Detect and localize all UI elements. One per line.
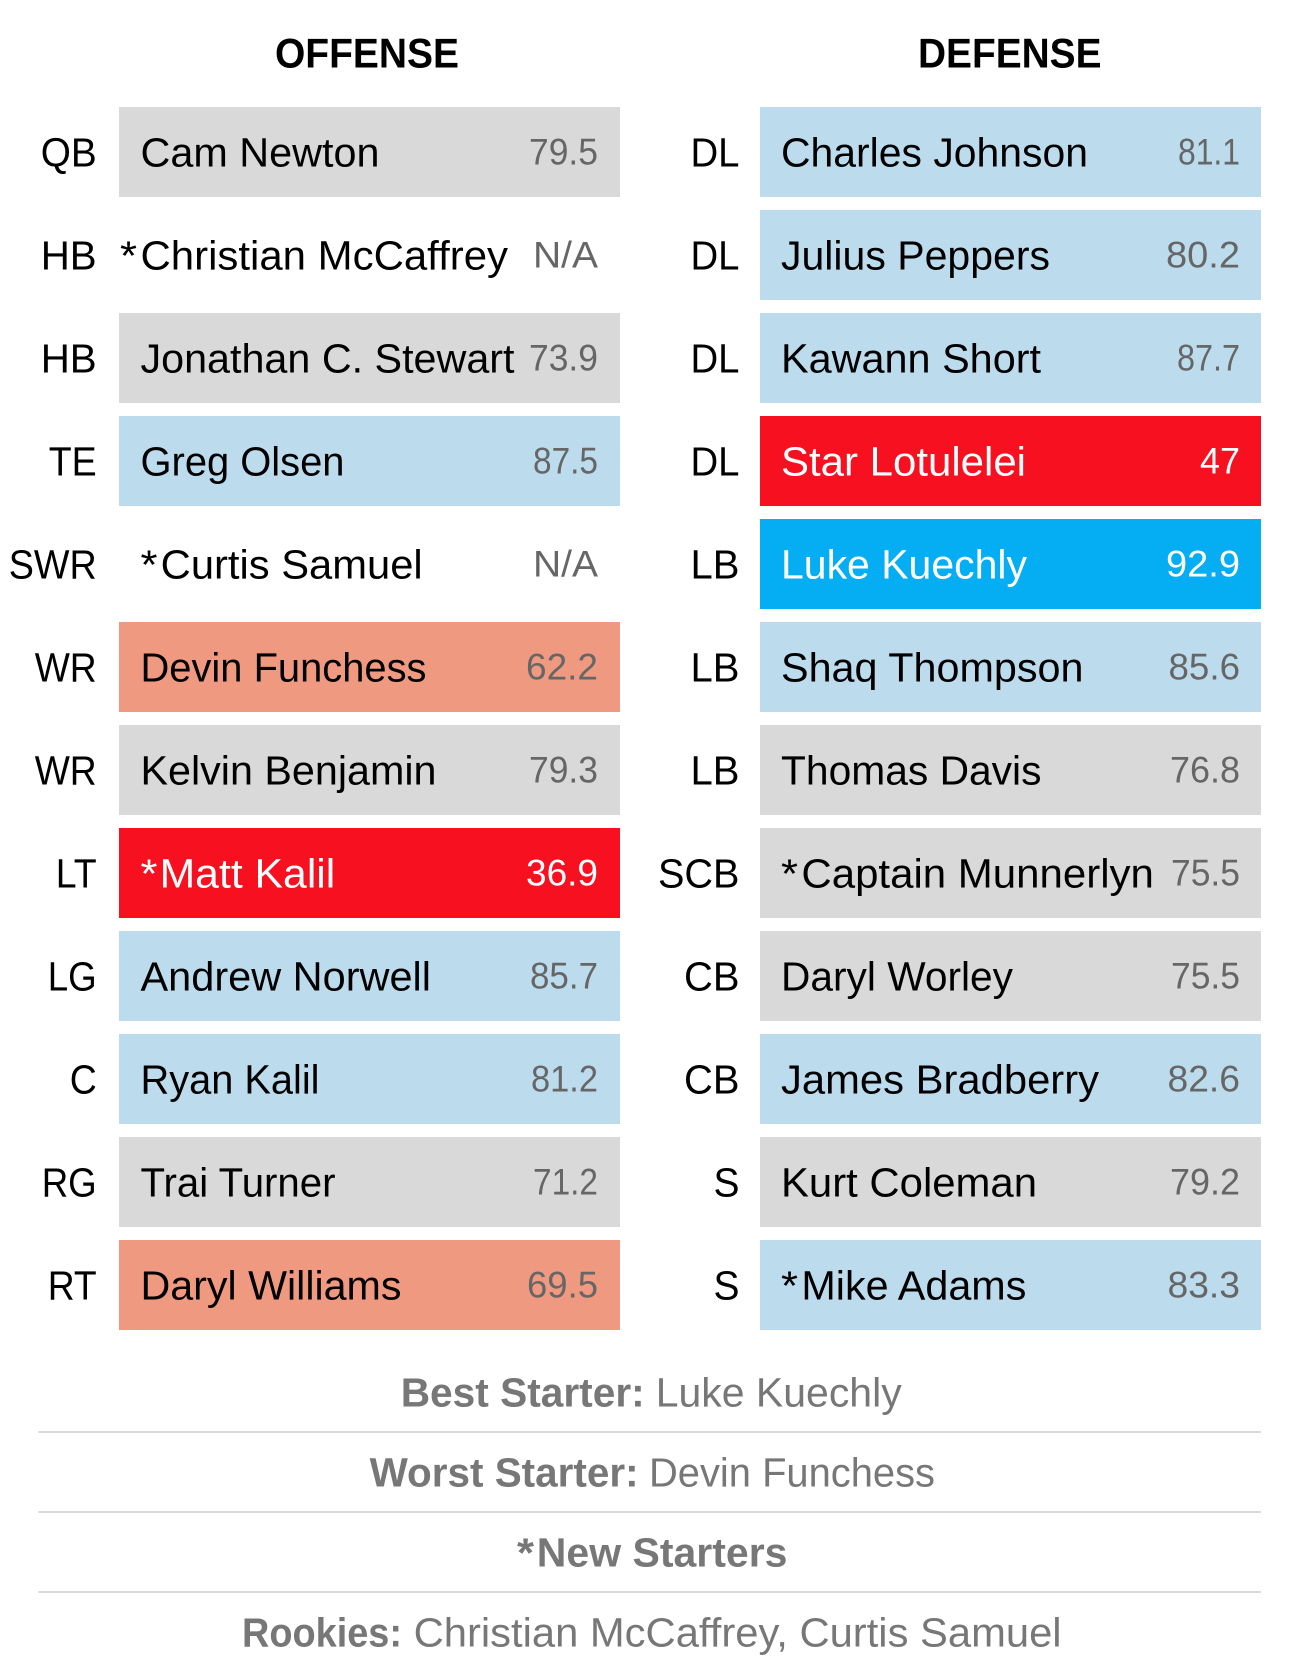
row: SCB Captain Munnerlyn: Captain Munnerlyn: [801, 850, 1154, 896]
row: RG Trai Turner: 71.2: [533, 1162, 598, 1202]
row: DL Julius Peppers: [690, 210, 1261, 300]
note: rookies: Christian McCaffrey, Curtis Samuel: [414, 1609, 1062, 1655]
row: SCB Captain Munnerlyn: [658, 828, 1261, 918]
row: WR Kelvin Benjamin: 79.3: [529, 750, 598, 790]
row: RT Daryl Williams: Daryl Williams: [140, 1262, 402, 1308]
heading: defense: DEFENSE: [918, 30, 1102, 76]
row: DL Kawann Short: [690, 313, 1261, 403]
row: DL Star Lotulelei: [690, 416, 1261, 506]
row: DL Charles Johnson: 81.1: [1178, 132, 1240, 172]
row: TE Greg Olsen: [49, 416, 620, 506]
row: CB Daryl Worley: 75.5: [1171, 956, 1240, 996]
row: LT Matt Kalil: [56, 828, 620, 918]
row: C Ryan Kalil: C: [70, 1056, 97, 1102]
row: SWR Curtis Samuel: N/A: [533, 544, 598, 584]
row: S Kurt Coleman: 79.2: [1170, 1162, 1240, 1202]
row: C Ryan Kalil: Ryan Kalil: [140, 1056, 320, 1102]
row: DL Kawann Short: Kawann Short: [781, 336, 1042, 382]
row: S Kurt Coleman: Kurt Coleman: [781, 1160, 1037, 1206]
row: LT Matt Kalil: Matt Kalil: [160, 850, 335, 896]
row: LB Luke Kuechly: LB: [690, 542, 740, 588]
row: RT Daryl Williams: RT: [48, 1262, 97, 1308]
note: best starter: [401, 1369, 902, 1415]
row: S Kurt Coleman: S: [714, 1160, 740, 1206]
row: DL Charles Johnson: DL: [690, 130, 740, 176]
row: LB Luke Kuechly: 92.9: [1166, 544, 1240, 584]
row: TE Greg Olsen: 87.5: [533, 440, 598, 482]
row: SCB Captain Munnerlyn: 75.5: [1171, 852, 1240, 894]
row: RT Daryl Williams: [48, 1240, 620, 1330]
row: LB Luke Kuechly: Luke Kuechly: [781, 542, 1027, 588]
row: WR Kelvin Benjamin: WR: [35, 748, 97, 794]
row: HB Jonathan C. Stewart: [41, 313, 620, 403]
row: RG Trai Turner: RG: [42, 1160, 97, 1206]
row: LB Thomas Davis: LB: [690, 748, 740, 794]
row: QB Cam Newton: 79.5: [529, 132, 598, 172]
heading: offense: OFFENSE: [275, 30, 459, 76]
row: LG Andrew Norwell: LG: [48, 954, 97, 1000]
row: LT Matt Kalil: *: [140, 850, 158, 896]
note: worst starter: Devin Funchess: [649, 1449, 935, 1495]
row: SWR Curtis Samuel: Curtis Samuel: [161, 542, 423, 588]
row: LT Matt Kalil: 36.9: [526, 852, 598, 894]
row: DL Charles Johnson: Charles Johnson: [781, 130, 1088, 176]
row: S Mike Adams: S: [714, 1262, 740, 1308]
note: rookies: Rookies:: [242, 1609, 402, 1655]
row: LB Thomas Davis: 76.8: [1170, 750, 1240, 790]
panel: defense: [658, 30, 1261, 1330]
row: S Mike Adams: 83.3: [1168, 1264, 1240, 1306]
row: RG Trai Turner: Trai Turner: [140, 1160, 336, 1206]
row: QB Cam Newton: [41, 107, 620, 197]
row: WR Devin Funchess: [35, 622, 620, 712]
row: HB Jonathan C. Stewart: HB: [41, 336, 97, 382]
row: HB Jonathan C. Stewart: Jonathan C. Stewart: [140, 336, 515, 382]
row: CB James Bradberry: [684, 1034, 1261, 1124]
row: HB Christian McCaffrey: [41, 232, 598, 278]
row: LB Luke Kuechly: [690, 519, 1261, 609]
row: WR Devin Funchess: Devin Funchess: [140, 644, 426, 690]
row: CB Daryl Worley: Daryl Worley: [781, 954, 1013, 1000]
row: C Ryan Kalil: [70, 1034, 620, 1124]
row: SWR Curtis Samuel: [9, 542, 598, 588]
row: SWR Curtis Samuel: SWR: [9, 542, 97, 588]
note: worst starter: Worst Starter:: [370, 1449, 639, 1495]
row: SWR Curtis Samuel: *: [140, 542, 158, 588]
row: LG Andrew Norwell: 85.7: [530, 956, 598, 996]
row: DL Kawann Short: DL: [690, 336, 740, 382]
note: best starter: Best Starter:: [401, 1369, 645, 1415]
row: WR Kelvin Benjamin: Kelvin Benjamin: [140, 748, 436, 794]
row: LB Thomas Davis: Thomas Davis: [781, 748, 1042, 794]
panel: summary notes: [38, 1369, 1261, 1655]
row: CB James Bradberry: CB: [684, 1056, 740, 1102]
row: CB Daryl Worley: [684, 931, 1261, 1021]
row: DL Julius Peppers: Julius Peppers: [781, 232, 1050, 278]
row: C Ryan Kalil: 81.2: [531, 1058, 598, 1100]
row: DL Star Lotulelei: Star Lotulelei: [781, 438, 1026, 484]
row: RT Daryl Williams: 69.5: [527, 1264, 598, 1306]
row: RG Trai Turner: [42, 1137, 620, 1227]
row: HB Jonathan C. Stewart: 73.9: [529, 338, 598, 378]
row: HB Christian McCaffrey: Christian McCaffrey: [140, 232, 509, 278]
row: LB Shaq Thompson: 85.6: [1168, 646, 1240, 688]
row: WR Devin Funchess: 62.2: [526, 646, 598, 688]
row: CB Daryl Worley: CB: [684, 954, 740, 1000]
row: LB Shaq Thompson: [690, 622, 1261, 712]
note: best starter: Luke Kuechly: [656, 1369, 902, 1415]
row: QB Cam Newton: Cam Newton: [140, 130, 380, 176]
panel: offense: [9, 30, 620, 1330]
row: LB Shaq Thompson: Shaq Thompson: [781, 644, 1084, 690]
row: DL Charles Johnson: [690, 107, 1261, 197]
row: LT Matt Kalil: LT: [56, 850, 97, 896]
row: LB Thomas Davis: [690, 725, 1261, 815]
row: LB Shaq Thompson: LB: [690, 644, 740, 690]
row: S Kurt Coleman: [714, 1137, 1261, 1227]
row: TE Greg Olsen: TE: [49, 438, 97, 484]
row: WR Kelvin Benjamin: [35, 725, 620, 815]
row: DL Julius Peppers: DL: [690, 232, 740, 278]
row: DL Star Lotulelei: 47: [1200, 440, 1240, 482]
row: S Mike Adams: Mike Adams: [801, 1262, 1026, 1308]
row: CB James Bradberry: James Bradberry: [781, 1056, 1100, 1102]
row: S Mike Adams: [714, 1240, 1261, 1330]
row: WR Devin Funchess: WR: [35, 644, 97, 690]
row: QB Cam Newton: QB: [41, 130, 97, 176]
row: S Mike Adams: *: [781, 1262, 798, 1308]
row: LG Andrew Norwell: Andrew Norwell: [140, 954, 431, 1000]
row: SCB Captain Munnerlyn: *: [781, 850, 798, 896]
row: DL Star Lotulelei: DL: [690, 438, 740, 484]
note: worst starter: [370, 1449, 935, 1495]
row: DL Julius Peppers: 80.2: [1166, 234, 1240, 276]
row: CB James Bradberry: 82.6: [1168, 1058, 1240, 1100]
row: LG Andrew Norwell: [48, 931, 620, 1021]
row: TE Greg Olsen: Greg Olsen: [140, 438, 344, 484]
row: SCB Captain Munnerlyn: SCB: [658, 850, 740, 896]
row: DL Kawann Short: 87.7: [1177, 338, 1240, 378]
note: new starters: New Starters: [537, 1529, 788, 1575]
row: HB Christian McCaffrey: *: [120, 232, 137, 278]
row: HB Christian McCaffrey: N/A: [533, 234, 598, 276]
row: HB Christian McCaffrey: HB: [41, 232, 97, 278]
note: new starters: *: [517, 1529, 534, 1575]
